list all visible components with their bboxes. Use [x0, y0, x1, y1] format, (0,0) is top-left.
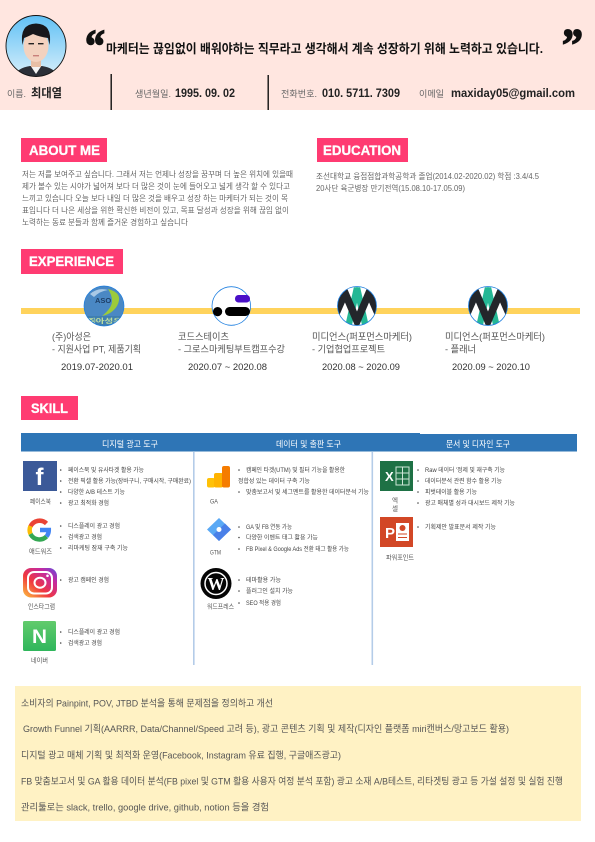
wordpress skills: 워드프레스 — [207, 602, 234, 610]
logo: code states — [212, 287, 251, 325]
experience: 미디언스 플래너: 2020.09 ~ 2020.10 — [452, 362, 530, 373]
birth date: 생년월일. — [135, 88, 171, 99]
about me text — [22, 169, 293, 227]
wordpress skills — [207, 576, 293, 610]
heading: skill: SKILL — [31, 400, 68, 416]
summary line 2: Growth Funnel 기획(AARRR, Data/Channel/Speed 고려 등), 광고 콘텐츠 기획 및 제작(디자인 플랫폼 miri캔버스/망고보드 활용) — [23, 723, 509, 735]
GA skills: 캠페인 타겟(UTM) 및 필터 기능을 활용한 — [246, 466, 345, 474]
facebook skills: 전환 픽셀 활용 가능(장바구니, 구매시작, 구매완료) — [68, 477, 191, 485]
experience: 미디언스 플래너 — [445, 331, 545, 373]
summary line 4: FB 맞춤보고서 및 GA 활용 데이터 분석(FB pixel 및 GTM 활용 사용자 여정 분석 포함) 광고 소재 A/B테스트, 리타겟팅 광고 등 가설 설정 및 실험 진행 — [21, 776, 563, 788]
summary line 3: 디지털 광고 매체 기획 및 최적화 운영(Facebook, Instagram 유료 집행, 구글애즈광고) — [21, 750, 341, 762]
icon: google tag manager — [207, 518, 231, 541]
heading: education: EDUCATION — [323, 142, 401, 158]
table header bar: 문서 및 디자인 도구 — [446, 439, 510, 449]
instagram skills: 인스타그램 — [28, 602, 55, 610]
GTM skills — [210, 523, 349, 556]
logo: mediance 2 — [468, 286, 508, 326]
experience: 아성은 — [52, 332, 141, 373]
table header bar — [21, 433, 577, 452]
education text: 조선대학교 융접점합과학공학과 졸업(2014.02-2020.02) 학점 :3.4/4.5 — [316, 171, 540, 181]
about me text: 노력하는 동료 분들과 함께 즐거운 경험하고 싶습니다 — [22, 217, 189, 227]
table header bar: 데이터 및 출판 도구 — [276, 439, 341, 449]
excel skills: 데이터분석 관련 함수 활용 기능 — [425, 477, 502, 485]
panel: about me — [21, 138, 293, 227]
wordpress skills: SEO 적용 경험 — [246, 599, 281, 607]
column: data and publishing — [200, 466, 369, 610]
instagram skills: 광고 캠페인 경험 — [68, 576, 109, 584]
powerpoint skills: 파워포인트 — [386, 552, 414, 562]
naver skills: 검색광고 경험 — [68, 639, 102, 647]
icon: naver: N — [32, 626, 47, 648]
name: 이름. — [7, 89, 26, 99]
experience: 미디언스 플래너: 미디언스(퍼포먼스마케터) — [445, 331, 545, 343]
icon: instagram — [23, 568, 57, 598]
GA skills: 정합성 있는 데이터 구축 기능 — [238, 477, 310, 485]
google skills: 리마케팅 잠재 구축 기능 — [68, 544, 128, 552]
phone: 010. 5711. 7309 — [322, 86, 400, 100]
excel skills — [392, 466, 515, 512]
about me text: 느끼고 있습니다 오늘 보다 내일 더 많은 것을 배우고 성장 하는 마케터가 되는 것이 목 — [22, 193, 288, 203]
education text: 20사단 육군병장 만기전역(15.08.10-17.05.09) — [316, 183, 465, 193]
facebook skills — [30, 466, 191, 507]
powerpoint skills: 기획제안 발표문서 제작 기능 — [425, 523, 496, 531]
heading: education — [317, 138, 408, 162]
birth date — [135, 86, 235, 100]
google skills: 애드워즈 — [29, 546, 52, 556]
icon: excel: X — [385, 469, 394, 484]
about me text: 표입니다 더 나은 세상을 위한 확신한 비전이 있고, 목표 달성과 성장을 위해 끊임 없이 — [22, 205, 289, 215]
panel: experience — [21, 249, 580, 373]
wordpress skills: 테마활용 가능 — [246, 576, 281, 584]
GTM skills: GTM — [210, 550, 221, 556]
experience: 코드스테이츠: 2020.07 ~ 2020.08 — [188, 362, 267, 373]
heading: about me: ABOUT ME — [29, 142, 100, 158]
experience: 미디언스 기업협업: 2020.08 ~ 2020.09 — [322, 362, 400, 373]
experience: 미디언스 기업협업: - 기업협업프로젝트 — [312, 344, 385, 356]
icon: google — [30, 521, 49, 539]
excel skills: 광고 매체별 성과 대시보드 제작 기능 — [425, 499, 515, 507]
opening quote mark: “ — [85, 20, 105, 71]
heading: about me — [21, 138, 107, 162]
phone: 전화번호. — [281, 89, 317, 99]
about me text: 저는 저를 보여주고 싶습니다. 그래서 저는 언제나 성장을 꿈꾸며 더 높은 위치에 있을때 — [22, 169, 293, 179]
facebook skills: 광고 최적화 경험 — [68, 499, 109, 507]
birth date: 1995. 09. 02 — [175, 86, 235, 100]
GTM skills: FB Pixel & Google Ads 전환 태그 활용 가능 — [246, 545, 349, 553]
panel: skill table — [21, 433, 577, 665]
quote text: 마케터는 끊임없이 배워야하는 직무라고 생각해서 계속 성장하기 위해 노력하고 있습니다. — [106, 41, 543, 56]
wordpress skills: 플러그인 설치 가능 — [246, 587, 293, 595]
summary line 1: 소비자의 Painpint, POV, JTBD 분석을 통해 문제점을 정의하고 개선 — [21, 698, 273, 710]
heading: experience: EXPERIENCE — [29, 253, 114, 269]
icon: naver — [23, 621, 56, 651]
closing quote mark: ” — [562, 19, 583, 70]
experience: 아성은: (주)아성은 — [52, 332, 91, 343]
logo: ASO: ASO — [95, 296, 111, 305]
phone — [281, 86, 400, 100]
excel skills: 엑 — [392, 496, 398, 504]
column: digital ads — [23, 461, 191, 664]
experience: 아성은: 2019.07-2020.01 — [61, 362, 133, 373]
name: 최대열 — [31, 85, 62, 100]
experience: 아성은: - 지원사업 PT, 제품기획 — [52, 344, 141, 356]
google skills — [29, 522, 128, 556]
icon: wordpress — [200, 568, 232, 599]
email: 이메일 — [419, 89, 444, 99]
email: maxiday05@gmail.com — [451, 86, 575, 100]
icon: facebook — [23, 461, 57, 491]
naver skills: 네이버 — [31, 656, 48, 664]
excel skills: 피벗테이블 활용 기능 — [425, 488, 477, 496]
facebook skills: 다양한 A/B 테스트 기능 — [68, 488, 125, 496]
experience: 코드스테이츠 — [178, 332, 285, 373]
excel skills: 셀 — [392, 504, 398, 512]
education text — [316, 171, 540, 193]
GTM skills: 다양한 이벤트 태그 활용 가능 — [246, 534, 318, 542]
facebook skills: 페이스북 및 유사타겟 활용 가능 — [68, 466, 144, 474]
GA skills — [210, 466, 369, 506]
icon: google analytics — [207, 466, 230, 488]
google skills: 검색광고 경험 — [68, 533, 102, 541]
powerpoint skills — [386, 523, 496, 562]
naver skills — [31, 628, 120, 664]
experience: 미디언스 플래너: - 플래너 — [445, 344, 476, 356]
header band — [0, 0, 595, 110]
google skills: 디스플레이 광고 경험 — [68, 522, 120, 530]
experience: 미디언스 기업협업 — [312, 331, 412, 373]
summary line 5: 관리툴로는 slack, trello, google drive, github, notion 등을 경험 — [21, 802, 269, 814]
facebook skills: 페이스북 — [30, 496, 51, 506]
GTM skills: GA 및 FB 연동 가능 — [246, 523, 292, 531]
logo: ASO — [84, 286, 124, 326]
naver skills: 디스플레이 광고 경험 — [68, 628, 120, 636]
heading: skill — [21, 396, 78, 420]
experience: 미디언스 기업협업: 미디언스(퍼포먼스마케터) — [312, 331, 412, 343]
logo: ASO: ㈜아성은 — [86, 316, 122, 325]
about me text: 제가 볼수 있는 시야가 넓어져 보다 더 많은 것이 눈에 들어오고 넓게 생각 할 수 있다고 — [22, 181, 290, 191]
experience: 코드스테이츠: 코드스테이츠 — [178, 332, 229, 343]
icon: wordpress: W — [208, 574, 224, 594]
experience: 코드스테이츠: - 그로스마케팅부트캠프수강 — [178, 344, 285, 356]
instagram skills — [28, 576, 109, 610]
timeline bar — [21, 308, 580, 314]
GA skills: GA — [210, 498, 219, 506]
table header bar: 디지털 광고 도구 — [102, 439, 158, 449]
panel: summary callout — [15, 686, 581, 821]
icon: facebook: f — [36, 464, 44, 491]
icon: powerpoint: P — [385, 525, 395, 542]
profile photo — [5, 15, 67, 78]
GA skills: 맞춤보고서 및 세그멘트를 활용한 데이터분석 기능 — [246, 488, 369, 496]
name — [7, 85, 62, 100]
heading: experience — [21, 249, 123, 274]
excel skills: Raw 데이터 '정제 및 재구축 기능 — [425, 466, 505, 474]
logo: mediance 1 — [337, 286, 377, 326]
column: documents and design — [380, 461, 515, 562]
panel: education — [316, 138, 540, 193]
